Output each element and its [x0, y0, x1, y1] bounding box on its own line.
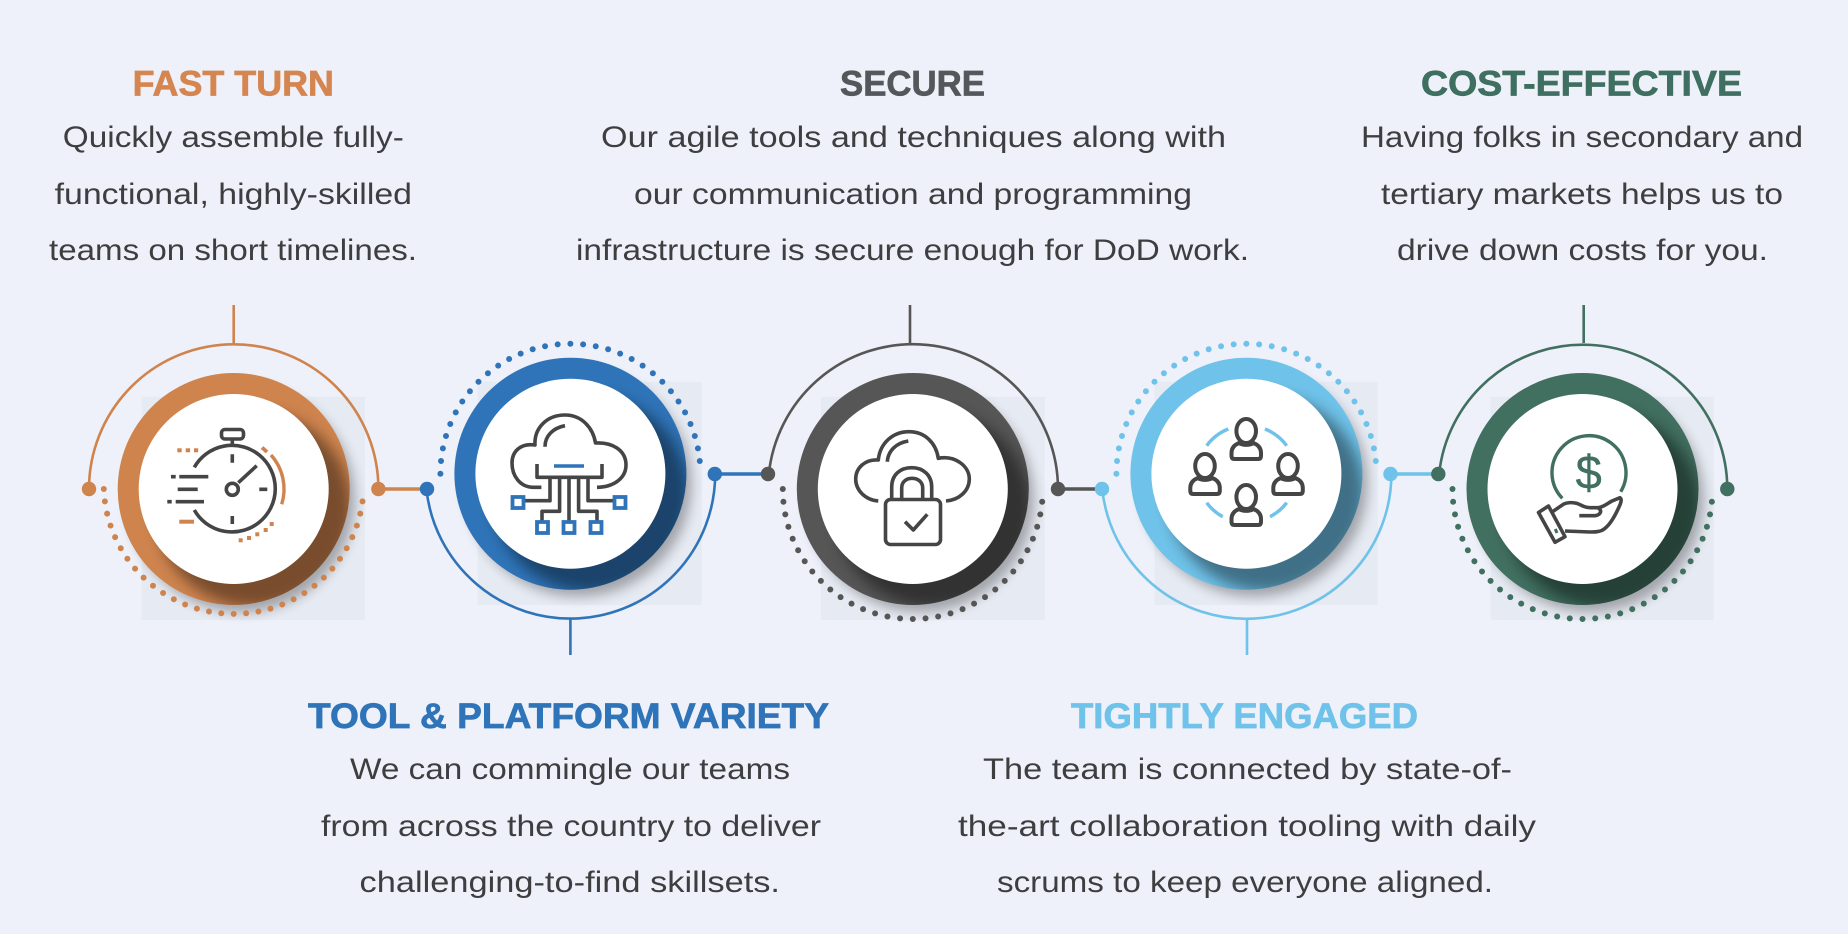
panel: cost-effective circle	[1431, 305, 1735, 620]
text block: tightly engaged description: scrums to keep everyone aligned.	[997, 866, 1493, 899]
heading: cost-effective: COST-EFFECTIVE	[1421, 65, 1742, 104]
text block: fast turn description: teams on short timelines.	[49, 234, 417, 267]
text block: fast turn description: functional, highly-skilled	[55, 178, 412, 211]
icon: stopwatch	[167, 430, 284, 542]
heading: secure: SECURE	[840, 65, 985, 104]
icon: cloud network	[512, 415, 626, 533]
text block: secure description	[576, 121, 1249, 267]
text block: tool and platform description	[321, 753, 821, 899]
icon: cloud padlock	[856, 432, 969, 544]
connector: blue to dark	[715, 472, 768, 476]
panel: secure text	[576, 65, 1249, 267]
icon: hand with dollar coin	[1538, 436, 1626, 542]
text block: secure description: our communication and programming	[634, 178, 1192, 211]
connector: light blue to green	[1390, 472, 1438, 476]
heading: tightly engaged: TIGHTLY ENGAGED	[1071, 697, 1418, 736]
text block: tightly engaged description	[958, 753, 1536, 899]
panel: cost-effective text	[1361, 65, 1803, 267]
icon: hand with dollar coin: $	[1576, 446, 1602, 498]
text block: tightly engaged description: The team is connected by state-of-	[983, 753, 1512, 786]
heading: fast turn: FAST TURN	[133, 65, 334, 104]
text block: cost-effective description: Having folks in secondary and	[1361, 121, 1803, 154]
icon: connected people	[1190, 419, 1303, 525]
text block: secure description: Our agile tools and techniques along with	[601, 121, 1226, 154]
text block: cost-effective description: drive down costs for you.	[1397, 234, 1768, 267]
panel: tightly engaged text	[958, 697, 1536, 899]
text block: fast turn description	[49, 121, 417, 267]
text block: tool and platform description: challenging-to-find skillsets.	[360, 866, 780, 899]
text block: tightly engaged description: the-art collaboration tooling with daily	[958, 810, 1536, 843]
panel: fast turn circle	[82, 305, 386, 620]
panel: tightly engaged circle	[1095, 344, 1398, 655]
text block: fast turn description: Quickly assemble fully-	[63, 121, 404, 154]
connector: dark to light blue	[1058, 487, 1102, 491]
panel: fast turn text	[49, 65, 417, 267]
connector: orange to blue	[378, 487, 427, 491]
text block: tool and platform description: from across the country to deliver	[321, 810, 821, 843]
panel: tool and platform circle	[420, 344, 722, 655]
text block: cost-effective description: tertiary markets helps us to	[1381, 178, 1783, 211]
panel: secure circle	[761, 305, 1065, 620]
text block: tool and platform description: We can commingle our teams	[350, 753, 790, 786]
heading: tool and platform variety: TOOL & PLATFORM VARIETY	[308, 697, 829, 736]
panel: tool and platform variety text	[308, 697, 829, 899]
text block: secure description: infrastructure is secure enough for DoD work.	[576, 234, 1249, 267]
text block: cost-effective description	[1361, 121, 1803, 267]
